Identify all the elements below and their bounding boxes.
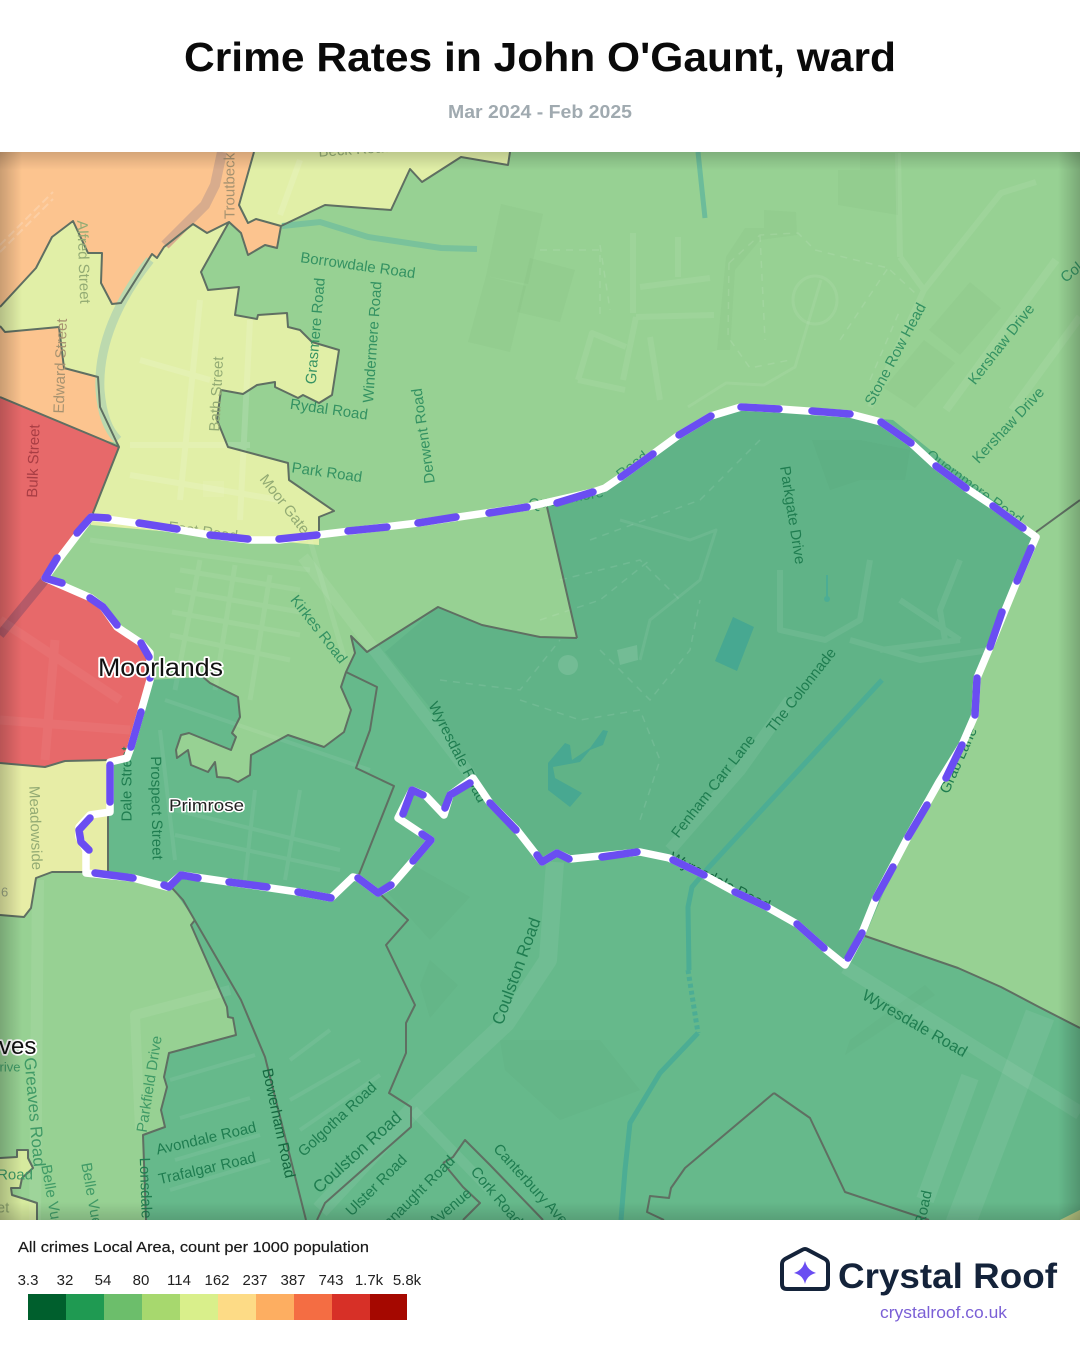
street labels: Kershaw Drive [965, 301, 1038, 388]
street labels: Grasmere Road [303, 277, 329, 385]
ward boundary: purple dashes [45, 407, 1031, 958]
area boundaries [0, 152, 1080, 1220]
legend scale values [18, 1272, 422, 1289]
logo wordmark: Crystal Roof [838, 1257, 1057, 1296]
place label: Greaves (clipped): ves [0, 1033, 36, 1060]
street labels: Alfred Street [73, 220, 93, 305]
street labels: Connaught Road [366, 1152, 459, 1245]
street labels: Coulston Road [309, 1108, 405, 1197]
street labels: Moor Gate [256, 471, 313, 538]
street labels: Trafalgar Road [157, 1149, 258, 1188]
street labels: Ulster Road [343, 1152, 411, 1220]
ward boundary: white line [45, 407, 1036, 965]
street labels: Canterbury Ave [490, 1140, 571, 1229]
legend scale values: 54 [95, 1272, 111, 1289]
street labels: Beck Road [318, 139, 392, 161]
legend scale values: 114 [167, 1272, 191, 1289]
street labels: Quernmore [527, 484, 605, 514]
street labels: Grab Lane [937, 724, 981, 796]
street labels: Wyresdale Road [859, 987, 970, 1061]
website: crystalroof.co.uk [880, 1304, 1008, 1322]
place label: Primrose: Primrose [169, 796, 244, 815]
street labels: Rydal Road [289, 396, 369, 424]
choropleth areas [0, 152, 1080, 1220]
legend title: All crimes Local Area, count per 1000 population [18, 1239, 369, 1256]
street labels: The Colonnade [763, 645, 840, 736]
street labels: Belle Vue [37, 1163, 65, 1229]
legend scale values: 237 [242, 1272, 268, 1289]
place label: Moorlands: Moorlands [98, 654, 223, 682]
street labels: Bowerham Road [258, 1067, 298, 1180]
map edge vignette [0, 152, 1080, 1220]
subtitle: date range: Mar 2024 - Feb 2025 [448, 102, 632, 122]
street labels: Kirkes Road [287, 592, 350, 667]
street labels: Stone Row Head [862, 300, 930, 408]
title: Crime Rates in John O'Gaunt, ward [184, 34, 896, 80]
legend scale values: 32 [57, 1272, 73, 1289]
street labels: Cork Road [467, 1164, 526, 1229]
street labels: Road [912, 1189, 936, 1227]
street labels: Parkgate Drive [776, 465, 808, 565]
logo: Crystal Roof [782, 1249, 1057, 1322]
street labels: Wyresdale Road [666, 849, 773, 914]
street labels: Belle Vue [77, 1161, 105, 1227]
legend scale values: 743 [318, 1272, 344, 1289]
street labels: Bath Street [206, 355, 227, 432]
street labels: Prospect Street [147, 756, 166, 861]
street labels: Windermere Road [360, 281, 385, 403]
legend scale values: 80 [133, 1272, 149, 1289]
street labels: Parkfield Drive [134, 1035, 166, 1134]
street labels: Quernmore Road [923, 447, 1026, 529]
legend scale values: 162 [204, 1272, 230, 1289]
rivers and ponds [282, 152, 882, 1220]
legend scale values: 5.8k [393, 1272, 422, 1289]
street labels: Golgotha Road [295, 1079, 380, 1160]
street labels: 6 [1, 885, 8, 900]
street labels: Park Road [291, 459, 363, 486]
street labels: Fenham Carr Lane [668, 732, 759, 841]
street labels: Avondale Road [154, 1119, 258, 1159]
street labels: Edward Street [51, 317, 71, 414]
roads [0, 152, 1080, 1225]
map base: light green area [0, 152, 1080, 1220]
legend [18, 1239, 422, 1320]
street labels: Avenue [426, 1185, 475, 1230]
land use patches [519, 258, 638, 675]
street labels: Lonsdale [136, 1157, 155, 1219]
street labels: Bulk Street [24, 423, 44, 498]
legend scale values: 1.7k [355, 1272, 384, 1289]
street labels: Wyresdale Road [425, 699, 490, 806]
legend scale values: 387 [280, 1272, 306, 1289]
street labels: Troutbeck [221, 152, 238, 219]
icon: house with star [782, 1249, 828, 1289]
street labels: Kershaw Drive [969, 384, 1048, 467]
legend colour bar [28, 1294, 407, 1320]
street labels: Meadowside [25, 786, 45, 870]
street labels: Borrowdale Road [299, 249, 416, 282]
street labels: Greaves Road [20, 1057, 49, 1167]
street labels: rive [0, 1060, 20, 1075]
street labels: Derwent Road [409, 387, 439, 485]
street labels: Road [613, 448, 652, 483]
street labels: Coulston Road [488, 915, 545, 1027]
street labels: Dale Street [118, 746, 135, 822]
street labels: East Road [167, 518, 239, 545]
legend scale values: 3.3 [18, 1272, 38, 1289]
